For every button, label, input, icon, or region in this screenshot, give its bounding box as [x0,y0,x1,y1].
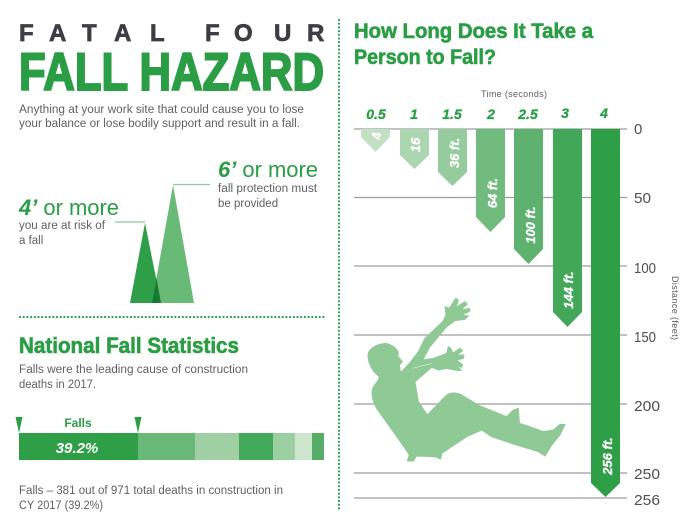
statistics description: Falls were the leading cause of construction [19,364,248,376]
fall time chart [354,89,680,509]
time axis labels: 2.5 [517,106,538,122]
callout: 6 feet: be provided [218,198,278,210]
callout: 6 feet: 6’ or more [218,157,318,182]
callout: 6 feet: fall protection must [218,183,318,195]
intro text [19,104,304,130]
callout: 6 feet [218,157,318,210]
stacked bar: causes of construction deaths: 39.2% [56,440,98,457]
intro text: Anything at your work site that could cause you to lose [19,104,304,116]
stacked bar: causes of construction deaths [16,416,324,460]
arrow bar: 2 seconds, 64 feet [476,129,505,232]
grid lines [354,129,627,498]
heading: how long does it take: How Long Does It Take a [354,19,594,43]
statistics description: deaths in 2017. [19,379,96,391]
callout: 4 feet [18,195,119,247]
arrow bar: 2 seconds, 64 feet: 64 ft. [485,178,500,208]
statistics footnote: Falls – 381 out of 971 total deaths in construction in [19,485,283,497]
arrow bar: 2.5 seconds, 100 feet [514,129,543,264]
distance axis labels: 100 [634,260,656,277]
arrow bar: 1 second, 16 feet: 16 [408,137,423,152]
arrow bar: 1 second, 16 feet [400,129,429,169]
distance axis labels: 256 [634,492,660,509]
distance axis labels: 0 [634,121,642,138]
arrow bar: 1.5 seconds, 36 feet [438,129,467,186]
statistics description [19,364,248,391]
distance axis labels: 50 [634,190,651,207]
callout: 4 feet: 4’ or more [18,195,119,220]
time axis labels: 1.5 [442,106,462,122]
intro text: your balance or lose bodily support and result in a fall. [19,118,300,130]
title: FALL HAZARD [19,43,324,102]
heading: national fall statistics: National Fall Statistics [19,333,239,358]
icon: falling person silhouette [368,298,565,461]
arrow bar: 3 seconds, 144 feet [553,129,582,327]
distance axis labels: 200 [634,398,660,415]
title: FATALFOUR [19,20,324,47]
distance axis labels [634,121,660,509]
statistics footnote [19,485,283,512]
arrow bar: 2.5 seconds, 100 feet: 100 ft. [523,206,538,244]
stacked bar: causes of construction deaths: Falls [64,416,92,430]
arrow bar: 0.5 seconds, 4 feet: 4 [369,132,384,141]
arrow bar: 4 seconds, 256 feet: 256 ft. [600,437,615,476]
time axis labels: 1 [410,106,418,122]
time axis title: Time (seconds) [481,89,547,99]
arrow bar: 1.5 seconds, 36 feet: 36 ft. [447,138,462,168]
arrow bar: 0.5 seconds, 4 feet [361,129,390,152]
time axis labels: 4 [599,105,608,121]
time axis labels [366,105,608,122]
heading: how long does it take [354,19,594,69]
time axis labels: 3 [561,105,569,121]
distance axis labels: 250 [634,466,660,483]
statistics footnote: CY 2017 (39.2%) [19,500,103,512]
heading: how long does it take: Person to Fall? [354,45,496,69]
title [19,20,324,102]
callout: 4 feet: you are at risk of [19,220,106,232]
callout: 4 feet: a fall [19,235,43,247]
distance axis labels: 150 [634,329,656,346]
arrow bar: 3 seconds, 144 feet: 144 ft. [561,271,576,309]
time axis labels: 0.5 [366,106,386,122]
height triangles chart [115,184,210,303]
arrow bar: 4 seconds, 256 feet [591,129,620,497]
time axis labels: 2 [486,106,495,122]
distance axis title: Distance (feet) [670,276,680,340]
